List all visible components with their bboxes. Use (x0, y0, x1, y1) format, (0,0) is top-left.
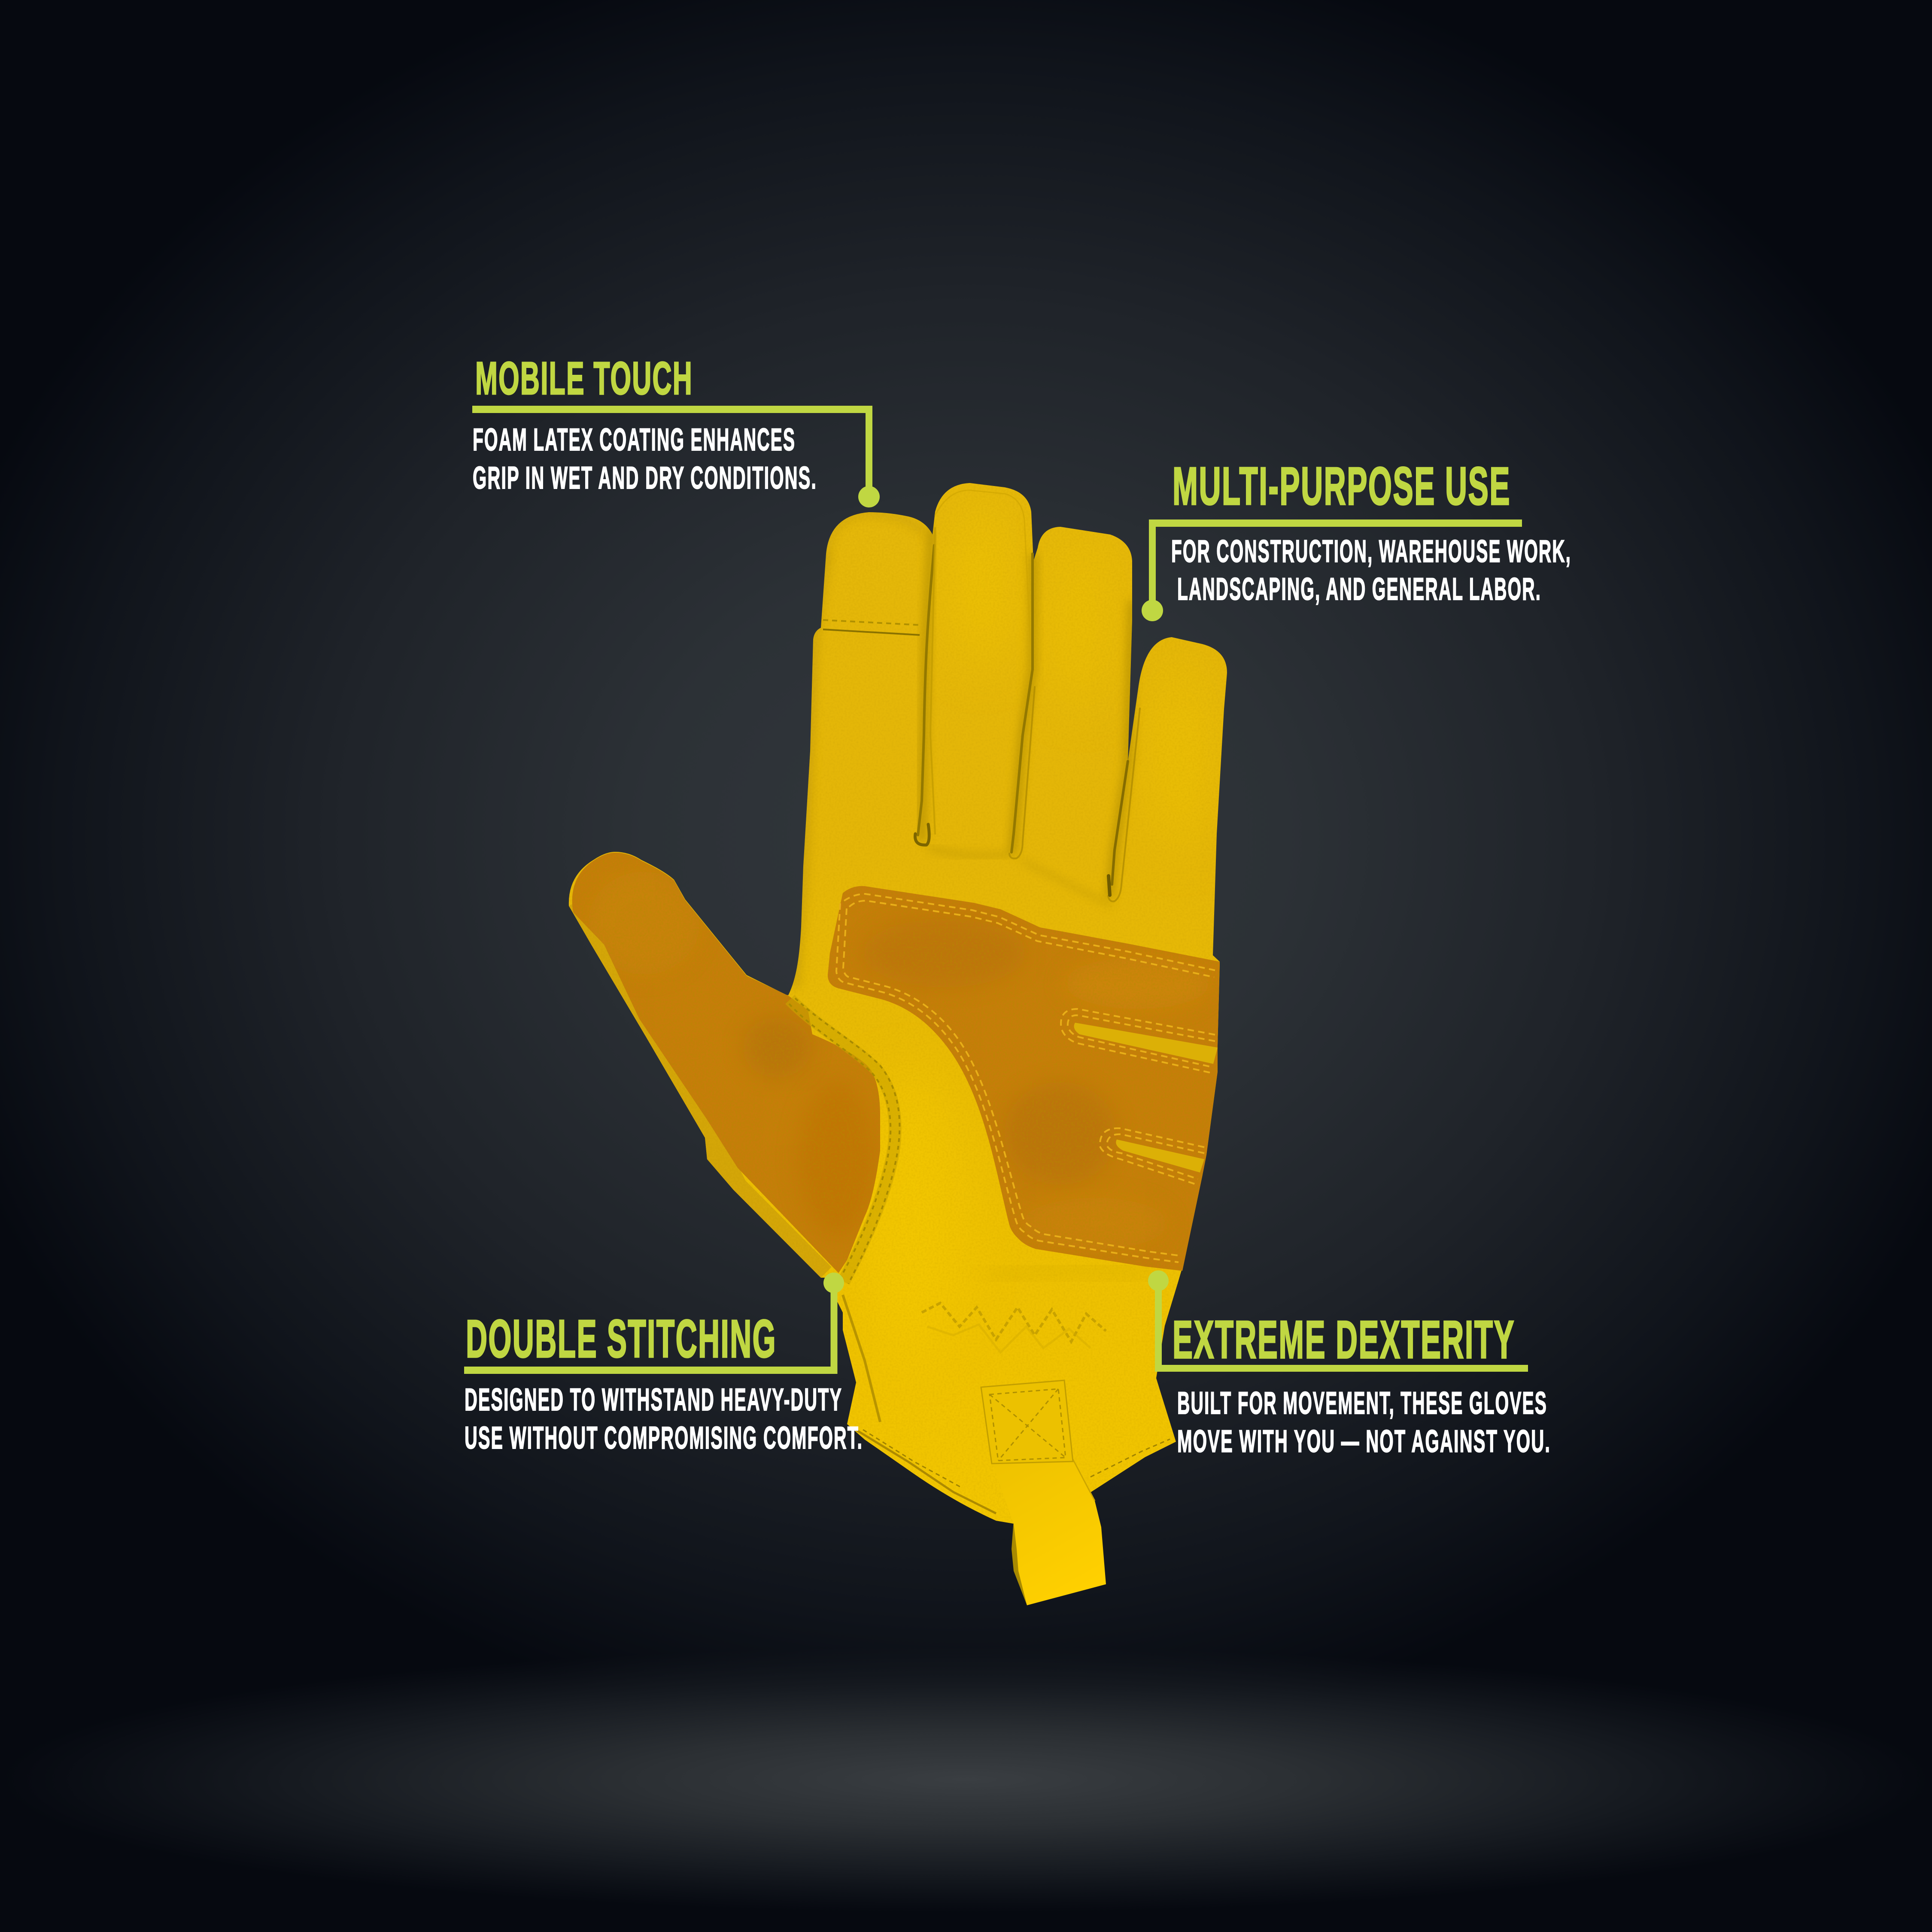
marker dot: double stitching (823, 1273, 844, 1293)
callout: extreme dexterity (1148, 1270, 1551, 1459)
wrist gathered stitching (922, 1303, 1106, 1352)
text: double stitching description: USE WITHOUT COMPROMISING COMFORT. (465, 1421, 863, 1455)
text: multi-purpose use description (1171, 534, 1571, 607)
text: extreme dexterity description: MOVE WITH YOU — NOT AGAINST YOU. (1177, 1424, 1551, 1459)
marker dot: mobile touch (858, 486, 880, 507)
strap loop (992, 1459, 1106, 1605)
finger seams (915, 490, 1140, 902)
text: double stitching description: DESIGNED TO WITHSTAND HEAVY-DUTY (465, 1382, 842, 1417)
wrist strap tab (981, 1380, 1106, 1605)
marker dot: multi-purpose use (1142, 600, 1163, 621)
thumb seam double stitching (789, 998, 1170, 1513)
palm suede patch (824, 884, 1224, 1273)
text: extreme dexterity description: BUILT FOR MOVEMENT, THESE GLOVES (1177, 1386, 1547, 1421)
glove shading (558, 472, 1245, 1546)
callout: mobile touch (472, 352, 880, 507)
fingertip touch panel seam (823, 620, 922, 635)
leader line: double stitching (464, 1283, 837, 1374)
glove illustration (558, 472, 1245, 1605)
leader line: extreme dexterity (1155, 1281, 1528, 1372)
patch stitching (836, 894, 1215, 1262)
marker dot: extreme dexterity (1148, 1270, 1169, 1291)
thumb suede panel (572, 853, 880, 1273)
leader line: mobile touch (472, 406, 872, 497)
heading: double stitching: DOUBLE STITCHING (466, 1309, 777, 1369)
text: mobile touch description: FOAM LATEX COATING ENHANCES (473, 422, 796, 457)
glove body leather (569, 483, 1227, 1524)
callout: double stitching (464, 1273, 863, 1455)
callout: multi-purpose use (1142, 457, 1571, 621)
heading: mobile touch: MOBILE TOUCH (475, 352, 693, 404)
leader line: multi-purpose use (1149, 519, 1522, 611)
heading: multi-purpose use: MULTI-PURPOSE USE (1173, 457, 1511, 516)
text: mobile touch description (473, 422, 817, 495)
patch finger slots (1061, 1009, 1218, 1185)
text: multi-purpose use description: LANDSCAPING, AND GENERAL LABOR. (1177, 572, 1541, 607)
text: double stitching description (465, 1382, 863, 1455)
text: extreme dexterity description (1177, 1386, 1551, 1459)
text: multi-purpose use description: FOR CONSTRUCTION, WAREHOUSE WORK, (1171, 534, 1571, 569)
text: mobile touch description: GRIP IN WET AND DRY CONDITIONS. (473, 461, 817, 495)
heading: extreme dexterity: EXTREME DEXTERITY (1173, 1310, 1515, 1370)
